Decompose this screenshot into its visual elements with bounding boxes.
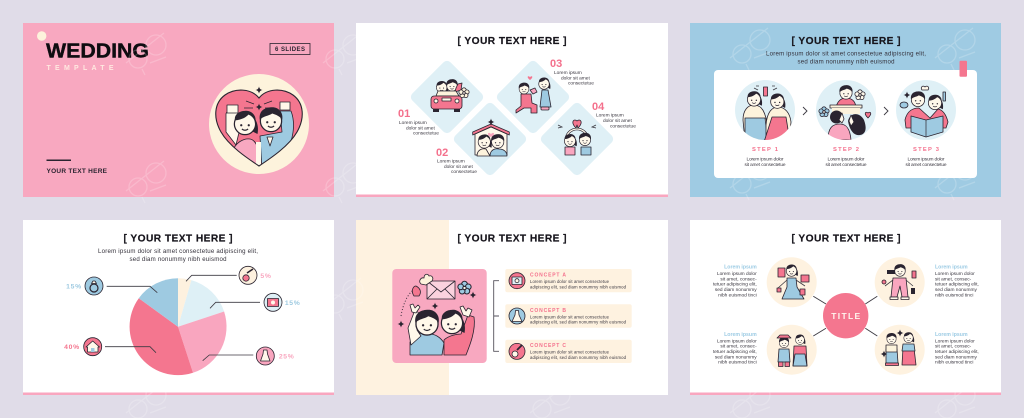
item 02 text: consectetue — [451, 169, 477, 175]
diamond 1: car — [409, 59, 485, 135]
step 1 label: Lorem ipsum dolor — [746, 157, 784, 163]
subtitle — [766, 50, 926, 66]
panel: pie chart — [23, 220, 334, 395]
text: lower left: tetuer adipiscing elit, — [713, 349, 757, 355]
text: lower right: Lorem ipsum dolor — [935, 338, 975, 344]
text: upper right: sit amet, consec- — [935, 276, 972, 282]
text: lower left: Lorem ipsum — [724, 332, 757, 338]
subtitle: sed diam nonummy nibh euismod — [798, 58, 894, 66]
item 03 text: consectetue — [568, 80, 594, 86]
text: upper right: Lorem ipsum — [935, 264, 968, 270]
concept b: CONCEPT B — [530, 308, 566, 314]
connectors — [813, 296, 877, 336]
item 01 text: consectetue — [413, 130, 439, 136]
item 03 text — [550, 58, 594, 86]
item 04 text: Lorem ipsum — [596, 112, 624, 118]
concept a: Lorem ipsum dolor sit amet consectetue — [530, 279, 610, 284]
text: upper left: Lorem ipsum — [724, 264, 757, 270]
pink tab — [960, 61, 967, 77]
hub: title: TITLE — [831, 311, 861, 321]
chevron 2 — [884, 107, 888, 115]
text: lower left: sed diam nonummy — [715, 354, 757, 360]
item 03 text: 03 — [550, 58, 562, 70]
text: upper left: Lorem ipsum dolor — [717, 271, 757, 277]
15% label with camera icon: 15% — [285, 300, 301, 307]
diamond 2: house — [452, 101, 528, 177]
concept a: CONCEPT A — [530, 272, 566, 278]
text: lower left: nibh euismod tinci — [718, 360, 757, 366]
hub: title — [823, 293, 868, 338]
step 3 label — [906, 147, 947, 168]
step 3 label: Lorem ipsum dolor — [908, 157, 945, 163]
text: upper right: Lorem ipsum dolor — [935, 271, 975, 277]
item 02 text: Lorem ipsum — [437, 158, 465, 164]
text: lower right: Lorem ipsum — [935, 332, 968, 338]
item 01 text: 01 — [398, 108, 410, 120]
step 1 label — [744, 147, 786, 168]
concept c: adipiscing elit, sed diam nonummy nibh euismod — [530, 355, 627, 360]
concept c: Lorem ipsum dolor sit amet consectetue — [530, 350, 610, 355]
item 01 text — [398, 108, 439, 136]
leader line: house — [105, 347, 156, 353]
concept c — [505, 340, 632, 363]
text: upper right: tetuer adipiscing elit, — [935, 282, 979, 288]
15% label with ring icon: 15% — [66, 284, 82, 290]
cream accent dot — [37, 31, 46, 41]
panel: three steps — [690, 23, 1001, 197]
item 02 text — [436, 147, 477, 175]
concept b: Lorem ipsum dolor sit amet consectetue — [530, 314, 610, 319]
step 1 illustration — [735, 80, 795, 142]
heading: wedding: WEDDING — [46, 40, 149, 62]
15% label with camera icon — [264, 293, 301, 311]
text: upper left: sed diam nonummy — [715, 287, 757, 293]
subtitle: Lorem ipsum dolor sit amet consectetue adipiscing elit, — [766, 50, 926, 58]
step 1 label: sit amet consectetue — [744, 162, 786, 168]
panel: concepts — [356, 220, 668, 395]
illustration: couple in heart — [209, 74, 309, 174]
step 3 label: sit amet consectetue — [906, 162, 947, 168]
concept a: adipiscing elit, sed diam nonummy nibh euismod — [530, 284, 627, 289]
cover text: YOUR TEXT HERE — [46, 168, 108, 175]
text: lower left — [713, 332, 757, 366]
white card — [714, 70, 977, 178]
step 3 label: STEP 3 — [913, 147, 940, 153]
rule — [46, 160, 71, 161]
diamond 3: proposal — [495, 59, 571, 135]
text: lower right: sit amet, consec- — [935, 344, 972, 350]
step 2 label: Lorem ipsum dolor — [828, 157, 865, 163]
figure: couple in hanbok — [875, 325, 925, 375]
40% label with house icon: 40% — [64, 344, 80, 351]
subtitle: sed diam nonummy nibh euismod — [130, 256, 226, 263]
figure: groom in pink suit — [875, 257, 925, 307]
panel: wedding cover — [23, 23, 334, 197]
text: lower right — [935, 332, 979, 366]
bracket — [494, 281, 499, 351]
item 04 text: 04 — [592, 101, 605, 113]
step 2 label — [826, 147, 867, 168]
text: upper left: tetuer adipiscing elit, — [713, 282, 757, 288]
step 1 label: STEP 1 — [752, 147, 779, 153]
concept c: CONCEPT C — [530, 343, 566, 349]
subtitle: Lorem ipsum dolor sit amet consectetue adipiscing elit, — [98, 248, 258, 255]
item 01 text: Lorem ipsum — [399, 120, 427, 126]
item 04 text — [592, 101, 636, 129]
panel: four numbered items — [356, 23, 668, 197]
subtitle — [98, 248, 258, 263]
25% label with dress icon — [256, 347, 295, 365]
illustration: couple with envelope — [392, 269, 487, 363]
text: lower right: nibh euismod tinci — [935, 360, 973, 366]
title: [ YOUR TEXT HERE ] — [792, 234, 900, 244]
item 02 text: dolor sit amet — [444, 164, 473, 170]
badge: 6 slides — [270, 44, 310, 54]
text: lower left: Lorem ipsum dolor — [717, 338, 757, 344]
item 04 text: consectetue — [610, 123, 636, 129]
panel: hub diagram — [690, 220, 1001, 395]
step 2 illustration — [816, 80, 876, 140]
text: upper left — [713, 264, 757, 298]
leader line: ring — [107, 286, 157, 293]
pie chart — [130, 278, 227, 375]
15% label with ring icon — [66, 277, 103, 295]
item 02 text: 02 — [436, 147, 448, 159]
step 2 label: STEP 2 — [833, 147, 859, 153]
text: upper right: sed diam nonummy — [935, 287, 977, 293]
text: upper left: sit amet, consec- — [720, 276, 757, 282]
text: lower right: sed diam nonummy — [935, 354, 977, 360]
step 2 label: sit amet consectetue — [826, 162, 867, 168]
text: lower left: sit amet, consec- — [720, 344, 757, 350]
leader line: makeup — [186, 275, 237, 281]
step 3 illustration — [896, 80, 956, 140]
diamond 4: broken ring — [539, 101, 615, 177]
title: [ YOUR TEXT HERE ] — [458, 36, 566, 47]
5% label with makeup icon — [239, 266, 272, 284]
title: [ YOUR TEXT HERE ] — [124, 234, 232, 244]
text: lower right: tetuer adipiscing elit, — [935, 349, 979, 355]
5% label with makeup icon: 5% — [260, 273, 272, 280]
concept a — [505, 269, 632, 292]
leader line: camera — [210, 302, 260, 308]
item 01 text: dolor sit amet — [406, 125, 435, 131]
leader line: dress — [203, 355, 253, 361]
item 03 text: dolor sit amet — [561, 75, 590, 81]
text: upper right: nibh euismod tinci — [935, 292, 973, 298]
25% label with dress icon: 25% — [279, 354, 295, 360]
40% label with house icon — [64, 338, 102, 356]
item 04 text: dolor sit amet — [603, 118, 632, 124]
concept b — [505, 304, 632, 328]
badge: 6 slides: 6 SLIDES — [275, 47, 305, 53]
figure: couple in traditional dress — [767, 325, 817, 375]
subheading: template: TEMPLATE — [46, 65, 114, 72]
concept b: adipiscing elit, sed diam nonummy nibh euismod — [530, 320, 627, 325]
text: upper left: nibh euismod tinci — [718, 292, 757, 298]
item 03 text: Lorem ipsum — [554, 70, 582, 76]
title: [ YOUR TEXT HERE ] — [458, 234, 566, 244]
figure: bride with dress — [767, 257, 817, 307]
chevron 1 — [803, 107, 807, 115]
title: [ YOUR TEXT HERE ] — [792, 36, 900, 47]
text: upper right — [935, 264, 979, 298]
